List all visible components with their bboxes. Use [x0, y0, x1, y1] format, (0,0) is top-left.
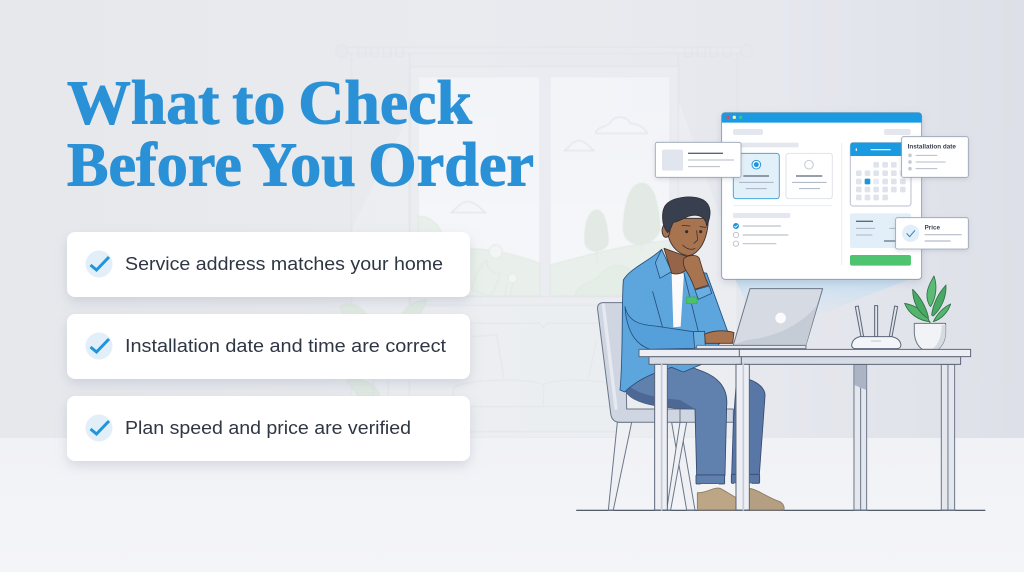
options list [733, 213, 790, 246]
popup: installation date [902, 137, 968, 177]
wall background [0, 0, 1024, 438]
typing hand [705, 331, 734, 343]
checklist card: installation date: Installation date and time are correct [125, 336, 446, 356]
icon: check badge [86, 332, 112, 360]
icon: check badge [86, 250, 112, 278]
head [662, 197, 710, 255]
title: Before You Order [67, 132, 534, 200]
background plant [340, 300, 427, 397]
checklist card: installation date [67, 314, 470, 379]
browser window [722, 113, 922, 279]
popup: installation date: Installation date [908, 144, 956, 151]
floor [0, 438, 1024, 572]
window landscape: hills and trees [418, 183, 670, 296]
neck [664, 248, 687, 274]
chin hand [683, 255, 709, 289]
window frame [410, 67, 678, 305]
desk scene [577, 197, 985, 510]
plan option selected [733, 153, 779, 199]
checklist card: plan speed [67, 396, 470, 461]
checklist card: service address: Service address matches your home [125, 254, 443, 274]
icon: check badge [86, 414, 112, 442]
plan option unselected [786, 153, 832, 199]
window light cones [352, 100, 737, 437]
router [852, 306, 901, 349]
desk [639, 349, 971, 510]
popup: address card [655, 142, 741, 177]
checklist card: plan speed: Plan speed and price are verified [125, 418, 411, 438]
green order button [850, 255, 911, 266]
light beam from laptop to order screen [735, 279, 910, 322]
floor line [577, 509, 985, 512]
popup: price: Price [925, 224, 940, 231]
laptop [697, 289, 823, 349]
popup: price [896, 218, 968, 249]
title [67, 70, 534, 200]
curtains [352, 53, 737, 430]
title: What to Check [67, 70, 473, 138]
jacket badge [686, 297, 697, 304]
background room: window, curtains and sofa [335, 45, 753, 437]
sill and sofa [410, 297, 683, 432]
white shirt [672, 273, 684, 327]
price summary box [850, 213, 911, 248]
order screen mockup [655, 113, 968, 279]
curtain rod with rings [335, 45, 753, 57]
back desk legs [854, 364, 955, 510]
chair [598, 303, 733, 510]
person [620, 197, 784, 510]
clouds [451, 117, 647, 213]
calendar [850, 143, 911, 206]
trousers and shoes [625, 367, 784, 510]
window panes [418, 77, 670, 296]
checklist card: service address [67, 232, 470, 297]
potted plant [905, 276, 951, 349]
jacket [620, 249, 728, 392]
